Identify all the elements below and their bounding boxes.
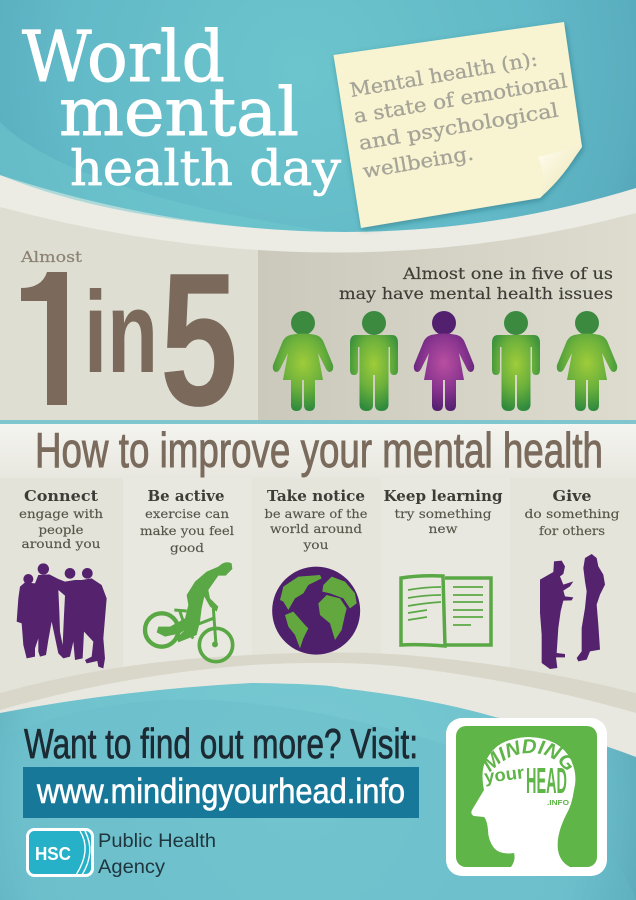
call to action: Want to find out more? Visit: xyxy=(24,720,418,767)
tip: give: Give xyxy=(552,487,592,505)
tip: connect xyxy=(17,487,107,668)
tip: be active: exercise can xyxy=(145,506,229,521)
logo wordmark: .INFO xyxy=(547,798,569,807)
statistic caption xyxy=(339,265,613,303)
note text: and psychological xyxy=(357,99,560,155)
tip: connect: people xyxy=(38,522,84,537)
icon: cyclist xyxy=(145,562,233,662)
title: World xyxy=(22,16,225,98)
tip column backgrounds xyxy=(0,478,636,703)
figure: woman xyxy=(273,311,333,411)
tip: take notice: be aware of the xyxy=(264,506,368,521)
tip: take notice: world around xyxy=(270,521,362,536)
panel: 1 in 5 statistic xyxy=(20,234,238,446)
title: mental xyxy=(59,74,299,151)
sticky note xyxy=(334,22,582,228)
tip: take notice xyxy=(264,487,368,655)
tip: take notice: Take notice xyxy=(267,487,365,505)
panel: how to improve heading band xyxy=(0,420,636,478)
icon: open book xyxy=(401,576,491,646)
tip: give: for others xyxy=(539,523,605,538)
tip: be active: good xyxy=(170,540,204,555)
logo wordmark: MINDING xyxy=(484,739,573,772)
tip: be active: make you feel xyxy=(140,523,234,538)
figure: highlighted woman xyxy=(414,311,474,411)
logo: minding your head xyxy=(446,718,607,876)
figure: woman xyxy=(557,311,617,411)
panel: people statistic xyxy=(273,265,617,411)
panel: footer xyxy=(23,718,607,878)
big 1 in 5: 5 xyxy=(160,234,238,446)
title xyxy=(22,16,341,197)
head silhouette xyxy=(471,737,575,867)
statistic caption: Almost one in five of us xyxy=(402,265,613,283)
footer background curves xyxy=(0,652,636,900)
statistic caption: may have mental health issues xyxy=(339,285,613,303)
tip: keep learning: try something xyxy=(394,506,492,521)
note text xyxy=(348,48,569,183)
tip: connect: around you xyxy=(22,536,100,551)
logo: HSC xyxy=(28,830,92,876)
panel: header xyxy=(0,0,636,253)
logo: HSC: HSC xyxy=(35,844,71,864)
tip: be active: Be active xyxy=(148,487,224,505)
agency name: Agency xyxy=(98,857,166,878)
note text: Mental health (n): xyxy=(348,48,539,102)
icon: group of people xyxy=(17,563,107,668)
tip: connect: engage with xyxy=(19,506,103,521)
note text: a state of emotional xyxy=(352,69,569,128)
people panel background xyxy=(258,200,636,421)
title: health day xyxy=(70,140,341,197)
tip: keep learning: new xyxy=(428,521,458,536)
figure: man xyxy=(350,311,398,411)
tip: keep learning xyxy=(384,487,503,646)
url banner xyxy=(23,767,419,818)
Almost label: Almost xyxy=(20,248,82,266)
logo wordmark xyxy=(483,739,573,807)
logo wordmark: HEAD xyxy=(526,760,567,801)
tip: give xyxy=(524,487,620,669)
agency name xyxy=(98,831,216,878)
tip: take notice: you xyxy=(302,537,328,552)
big 1 in 5 xyxy=(21,234,238,446)
icon: two people talking xyxy=(540,554,605,669)
note text: wellbeing. xyxy=(361,142,475,183)
logo wordmark: your xyxy=(483,762,525,787)
url banner: www.mindingyourhead.info xyxy=(36,772,405,811)
figure: man xyxy=(492,311,540,411)
panel: tips xyxy=(17,487,619,669)
icon: globe xyxy=(272,567,360,655)
agency name: Public Health xyxy=(98,831,216,852)
tip: give: do something xyxy=(524,506,620,521)
tip: keep learning: Keep learning xyxy=(384,487,503,505)
big 1 in 5: in xyxy=(84,267,158,397)
tip: connect: Connect xyxy=(24,487,98,505)
tip: be active xyxy=(140,487,234,662)
